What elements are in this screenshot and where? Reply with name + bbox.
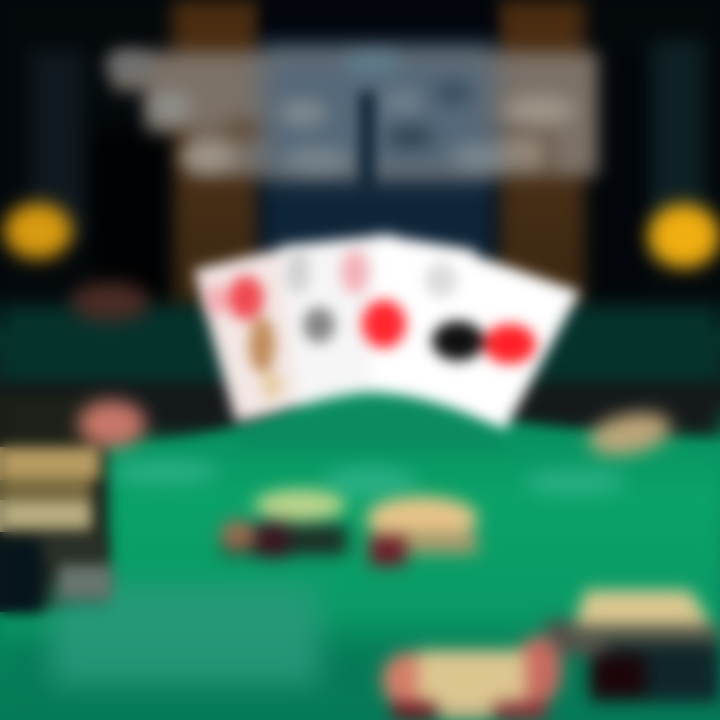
band: dark green table rail xyxy=(0,305,720,385)
cards: fanned hand xyxy=(194,234,580,450)
card: centre right xyxy=(370,234,475,407)
blurred shape: left rail red glow xyxy=(70,282,150,322)
left dark area beside the felt xyxy=(0,395,108,610)
left edge underlay: dark and tan bands xyxy=(0,410,11,612)
chip stack: bottom right dark xyxy=(545,590,720,702)
chip stack: left tan xyxy=(0,447,113,612)
chip stack: upper left red xyxy=(78,400,146,448)
title highlights and gaps xyxy=(106,53,576,172)
title: blurred heading block xyxy=(106,52,598,190)
chip stacks: centre pile xyxy=(220,489,478,566)
card: far right xyxy=(400,250,580,430)
card fan lower edge: felt arch xyxy=(240,392,505,450)
table: green felt xyxy=(0,412,720,634)
panel: pale teal lower left patch xyxy=(50,585,320,685)
icon: left glowing coin xyxy=(4,203,72,259)
card: far left xyxy=(194,244,330,422)
card: centre left xyxy=(280,234,420,412)
background: dark room xyxy=(0,0,720,330)
felt highlights xyxy=(110,459,627,498)
card suit marks xyxy=(206,250,536,399)
chip stack: bottom centre red and cream xyxy=(382,636,562,720)
icon: right glowing coin xyxy=(648,204,720,268)
chip stack: upper right tan xyxy=(585,406,675,462)
background: base gradient xyxy=(0,315,720,720)
